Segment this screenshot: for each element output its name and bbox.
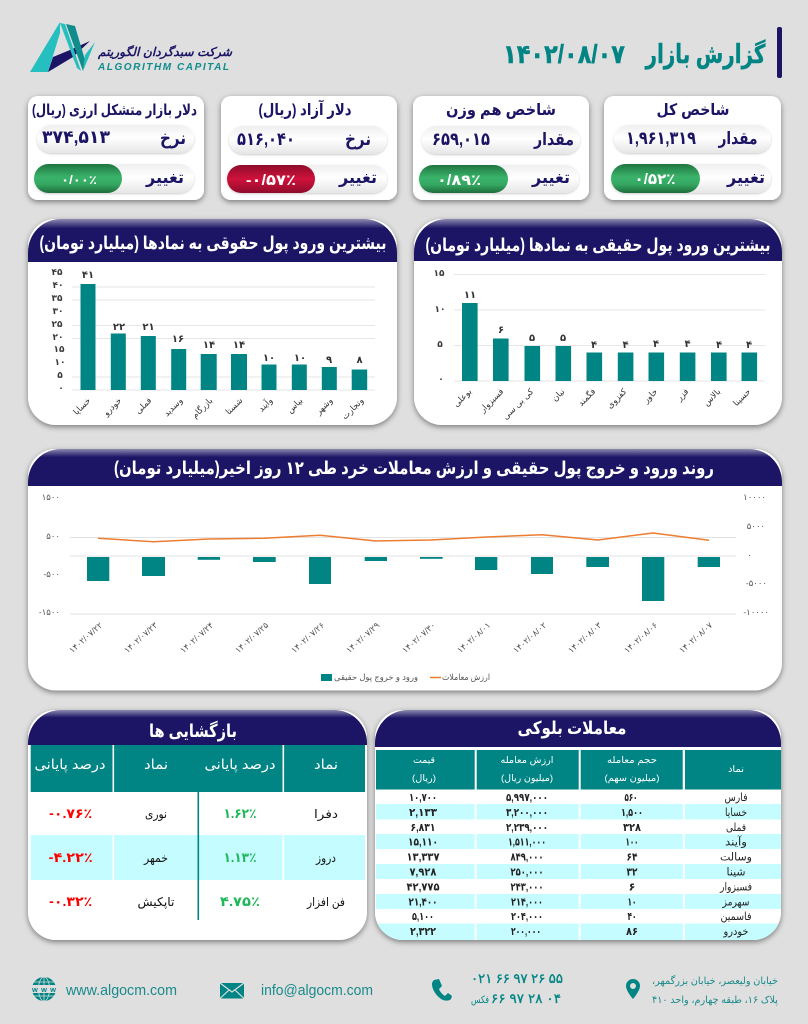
phone numbers: ۰۲۱ ۶۶ ۹۷ ۲۶ ۵۵	[471, 971, 563, 986]
table rows: ۱۰	[628, 896, 636, 908]
value labels: ۱۱	[464, 290, 476, 301]
table rows: ۴۰	[628, 911, 636, 923]
left axis: -۱۵۰۰	[39, 607, 60, 617]
right axis: ۵۰۰۰	[747, 521, 765, 531]
value labels: ۱۴	[233, 340, 245, 351]
table values: دروز	[315, 851, 336, 866]
table values: ۱.۶۲٪	[224, 806, 256, 821]
table rows: شینا	[726, 866, 746, 878]
value labels: ۸	[356, 355, 363, 366]
table header: نماد	[314, 756, 338, 772]
date labels: ۱۴۰۲/۰۷/۲۵	[233, 620, 271, 655]
table header: (ریال)	[412, 773, 436, 784]
panel heading	[414, 219, 782, 261]
axis ticks: ۱۰	[54, 357, 66, 367]
table rows: ۸۴۹,۰۰۰	[510, 852, 544, 864]
category labels: وتجارت	[339, 395, 365, 421]
footer	[30, 971, 778, 1006]
rate row	[37, 125, 194, 153]
change row: تغییر	[531, 168, 570, 188]
left axis: ۱۵۰۰	[42, 492, 60, 502]
title accent bar	[777, 27, 782, 78]
panel: 12 day trend	[28, 449, 782, 690]
table values: خمهر	[143, 851, 168, 866]
axis ticks: ۰	[438, 374, 444, 384]
category labels: فزر	[674, 386, 690, 403]
right axis: -۵۰۰۰	[746, 578, 767, 588]
table values: نوری	[145, 807, 167, 822]
panel: reopenings	[28, 710, 367, 940]
phone numbers: فکس	[471, 995, 489, 1006]
category labels: نیان	[550, 386, 566, 403]
change row: -۰/۵۷٪	[246, 172, 296, 189]
logo mark	[30, 22, 95, 72]
bars	[80, 284, 367, 390]
table rows: ۶	[629, 882, 635, 894]
value labels: ۱۴	[203, 340, 215, 351]
value labels: ۱۰	[294, 353, 306, 364]
panel heading	[28, 449, 782, 486]
value labels: ۲۱	[142, 322, 155, 333]
table rows: ۲۰۴,۰۰۰	[511, 911, 543, 923]
category labels: شستا	[223, 395, 244, 416]
panel heading	[28, 710, 367, 745]
category labels: بوعلی	[451, 386, 473, 409]
rate row: ۳۷۴,۵۱۳	[42, 127, 110, 147]
panel heading: بیشترین ورود پول حقوقی به نمادها (میلیارد تومان)	[40, 233, 386, 254]
table rows: ۶,۸۳۱	[410, 822, 436, 834]
panel: real money inflow	[414, 219, 782, 425]
card: total index	[604, 96, 781, 200]
table rows: ۲۱,۴۰۰	[408, 896, 438, 908]
logo	[30, 22, 233, 73]
table header	[31, 745, 365, 792]
table rows: فملی	[726, 822, 746, 834]
table rows: ۲۰۰,۰۰۰	[511, 926, 541, 938]
axis ticks: ۰	[58, 383, 64, 393]
date labels: ۱۴۰۲/۰۸/۰۱	[455, 620, 492, 655]
table rows: ۸۶	[626, 926, 638, 938]
phone numbers: ۶۶ ۹۷ ۲۸ ۰۴	[491, 991, 561, 1006]
rate row: نرخ	[160, 128, 186, 149]
value labels: ۴	[591, 340, 597, 351]
address: پلاک ۱۶، طبقه چهارم، واحد ۴۱۰	[652, 995, 778, 1006]
amount row	[614, 125, 771, 153]
axis ticks	[52, 267, 66, 393]
category labels: خاور	[640, 386, 659, 405]
table values: دفرا	[314, 807, 338, 822]
icon: globe: www	[31, 985, 56, 994]
icon: globe	[30, 977, 58, 1001]
card title: دلار بازار متشکل ارزی (ریال)	[32, 102, 197, 119]
legend: ارزش معاملات	[442, 672, 490, 682]
axis ticks: ۴۵	[52, 267, 63, 277]
table rows: ۳۲۸	[623, 822, 641, 834]
change row: تغییر	[145, 168, 184, 188]
table rows: فسبزوار	[719, 882, 752, 894]
table rows: ۷,۹۲۸	[410, 866, 437, 878]
value labels: ۴	[684, 339, 691, 350]
panel: block trades	[375, 710, 781, 940]
table header	[376, 750, 781, 790]
value labels	[82, 270, 363, 366]
change row	[419, 165, 579, 193]
table header: درصد پایانی	[34, 756, 106, 773]
date labels: ۱۴۰۲/۰۷/۲۹	[344, 620, 382, 655]
amount row: ۶۵۹,۰۱۵	[432, 129, 490, 149]
category labels: کفزوی	[605, 386, 629, 410]
axis ticks: ۳۰	[52, 306, 64, 316]
table rows: ۲۵۰,۰۰۰	[510, 866, 544, 878]
icon: phone	[432, 979, 452, 1001]
table rows: ۱۳,۳۳۷	[406, 852, 440, 864]
right axis: ۰	[747, 550, 752, 560]
legend: ورود و خروج پول حقیقی	[334, 672, 418, 682]
date labels: ۱۴۰۲/۰۸/۰۷	[677, 620, 715, 655]
category labels	[71, 395, 365, 421]
table rows: سهرمز	[722, 896, 750, 908]
value labels: ۴	[653, 339, 659, 350]
table rows: ۱۵,۱۱۰	[408, 836, 438, 848]
table header: حجم معامله	[607, 755, 657, 766]
axis ticks: ۴۰	[52, 280, 64, 290]
change row	[227, 165, 387, 193]
highlighted row	[31, 835, 365, 880]
date labels: ۱۴۰۲/۰۸/۰۲	[511, 620, 549, 655]
table rows: فارس	[724, 792, 748, 804]
email: info@algocm.com	[261, 983, 373, 999]
change row: تغییر	[338, 168, 377, 188]
table rows: ۳,۲۰۰,۰۰۰	[506, 807, 548, 819]
amount row: ۱,۹۶۱,۳۱۹	[626, 128, 696, 148]
amount row: مقدار	[533, 130, 574, 149]
category labels: وشهر	[313, 395, 334, 417]
axis ticks: ۱۵	[434, 268, 445, 278]
table rows: ۵۶۰	[624, 792, 638, 804]
card: equal weight index	[413, 96, 589, 200]
line: trade value	[98, 533, 709, 542]
bars	[462, 303, 757, 381]
table values: -۰.۷۶٪	[49, 806, 92, 821]
table: block trades	[376, 750, 781, 940]
table header: ارزش معامله	[500, 755, 554, 766]
change row: تغییر	[726, 168, 765, 188]
table rows: ۱۰۰	[626, 836, 638, 848]
table rows: ۲,۳۲۲	[410, 926, 436, 938]
report title: گزارش بازار	[644, 39, 766, 70]
bar chart: legal money	[52, 267, 375, 421]
card title: شاخص کل	[656, 102, 730, 119]
table values	[49, 806, 345, 910]
report date: ۱۴۰۲/۰۸/۰۷	[503, 39, 625, 69]
table rows: ۱,۵۱۱,۰۰۰	[508, 836, 546, 848]
table header: (میلیون ریال)	[501, 773, 553, 784]
panel: legal money inflow	[28, 219, 397, 425]
table rows: وسالت	[720, 852, 752, 864]
table rows: فاسمین	[720, 911, 752, 923]
table header: نماد	[728, 764, 744, 775]
amount row: مقدار	[718, 129, 758, 148]
date labels: ۱۴۰۲/۰۷/۳۰	[400, 620, 437, 655]
table rows: ۳۲	[626, 866, 638, 878]
right axis	[743, 492, 769, 617]
left axis: ۵۰۰	[46, 531, 60, 541]
panel heading	[375, 710, 781, 747]
table values: -۰.۳۲٪	[49, 894, 92, 909]
change row	[611, 164, 771, 193]
table rows: ۵,۱۰۰	[412, 911, 434, 923]
column divider	[198, 792, 199, 920]
address	[652, 975, 778, 1006]
legend	[321, 672, 490, 682]
card: free dollar	[221, 96, 397, 200]
category labels: فگمند	[576, 386, 597, 408]
date labels: ۱۴۰۲/۰۸/۰۳	[566, 620, 604, 655]
table rows: ۱,۵۰۰	[621, 807, 643, 819]
bars: real money flow	[87, 557, 720, 601]
website: www.algocm.com	[65, 983, 177, 999]
title	[503, 27, 782, 78]
bar chart: real money	[434, 268, 765, 421]
table values: -۴.۲۲٪	[49, 850, 93, 865]
table rows: خودرو	[723, 926, 748, 938]
table header: نماد	[144, 756, 168, 772]
date labels: ۱۴۰۲/۰۷/۲۳	[122, 620, 160, 655]
phone numbers	[471, 971, 563, 1006]
table header: (میلیون سهم)	[604, 773, 660, 784]
panel heading: معاملات بلوکی	[518, 718, 626, 739]
rate row: نرخ	[345, 129, 371, 150]
amount row	[422, 126, 580, 154]
panel heading: بازگشایی ها	[149, 720, 237, 741]
combo chart	[39, 492, 769, 682]
axis ticks: ۲۰	[52, 332, 64, 342]
right axis: ۱۰۰۰۰	[743, 492, 766, 502]
card title: شاخص هم وزن	[446, 102, 556, 119]
date labels: ۱۴۰۲/۰۸/۰۶	[622, 620, 659, 655]
value labels: ۲۲	[113, 322, 125, 333]
axis ticks: ۵	[437, 339, 443, 349]
rate row	[229, 126, 387, 154]
table rows: ۴۲,۷۷۵	[406, 882, 440, 894]
axis ticks: ۲۵	[52, 319, 63, 329]
change row	[34, 164, 194, 193]
address: خیابان ولیعصر، خیابان بزرگمهر،	[652, 975, 778, 987]
value labels: ۶	[498, 325, 504, 336]
company name: شرکت سبدگردان الگوریتم	[97, 44, 233, 60]
table header: درصد پایانی	[204, 756, 276, 773]
category labels: بازرگام	[190, 395, 214, 420]
card: organized market dollar	[28, 96, 204, 200]
value labels: ۴۱	[82, 270, 94, 281]
category labels: وآیند	[255, 395, 274, 414]
icon: location pin	[626, 979, 640, 999]
table rows	[406, 792, 752, 938]
axis ticks: ۱۵	[54, 344, 65, 354]
rate row: ۵۱۶,۰۴۰	[237, 129, 295, 149]
axis ticks: ۳۵	[52, 293, 63, 303]
table rows: وآیند	[725, 834, 747, 848]
table header: قیمت	[413, 755, 435, 766]
axis ticks	[434, 268, 446, 384]
change row: ۰/۰۰٪	[61, 173, 97, 187]
category labels: وسدید	[161, 395, 184, 418]
category labels	[451, 386, 752, 421]
table rows: ۱۰,۷۰۰	[409, 792, 437, 804]
change row: ۰/۵۲٪	[634, 171, 676, 188]
table rows: ۶۴	[626, 852, 638, 864]
table values: ۱.۱۳٪	[224, 850, 256, 865]
category labels: خودرو	[100, 395, 123, 418]
icon: mail	[220, 983, 244, 998]
axis ticks: ۱۰	[434, 304, 446, 314]
company latin name: ALGORITHM CAPITAL	[97, 62, 229, 73]
value labels: ۵	[529, 333, 535, 344]
value labels: ۹	[326, 355, 332, 366]
table values: تاپکیش	[138, 895, 174, 910]
category labels: بالاس	[701, 386, 722, 408]
value labels: ۴	[746, 340, 752, 351]
value labels: ۴	[716, 340, 722, 351]
table values: ۴.۷۵٪	[220, 894, 260, 909]
change row: ۰/۸۹٪	[437, 172, 481, 189]
table rows: ۲,۲۳۹,۰۰۰	[506, 822, 548, 834]
left axis: -۵۰۰	[43, 569, 60, 579]
value labels: ۱۰	[263, 353, 275, 364]
value labels: ۵	[560, 333, 566, 344]
table rows: ۲۱۴,۰۰۰	[511, 896, 543, 908]
date labels: ۱۴۰۲/۰۷/۲۲	[67, 620, 105, 655]
table rows: ۲,۱۳۳	[409, 807, 437, 819]
table rows: خسایا	[725, 807, 747, 819]
category labels: فسبزوار	[477, 386, 505, 415]
table values: فن افزار	[306, 895, 345, 910]
category labels: حسینا	[731, 386, 752, 408]
table rows: ۲۴۳,۰۰۰	[510, 882, 544, 894]
value labels: ۴	[622, 340, 629, 351]
table: reopenings	[31, 745, 365, 920]
right axis: -۱۰۰۰۰	[743, 607, 769, 617]
date labels	[67, 620, 715, 655]
date labels: ۱۴۰۲/۰۷/۲۴	[178, 620, 215, 655]
category labels: فملی	[133, 395, 153, 416]
panel heading	[28, 219, 397, 262]
left axis	[39, 492, 60, 617]
category labels: خساپا	[71, 395, 92, 417]
value labels	[464, 290, 752, 351]
date labels: ۱۴۰۲/۰۷/۲۶	[289, 620, 326, 655]
panel heading: روند ورود و خروج پول حقیقی و ارزش معاملات خرد طی ۱۲ روز اخیر(میلیارد تومان)	[114, 458, 714, 479]
table rows: ۵,۹۹۷,۰۰۰	[506, 792, 548, 804]
card title: دلار آزاد (ریال)	[258, 99, 352, 119]
value labels: ۱۶	[172, 334, 184, 345]
category labels: بپاس	[285, 395, 304, 415]
category labels: کی بی سی	[500, 386, 536, 421]
row bands	[376, 804, 781, 940]
axis ticks: ۵	[57, 370, 63, 380]
